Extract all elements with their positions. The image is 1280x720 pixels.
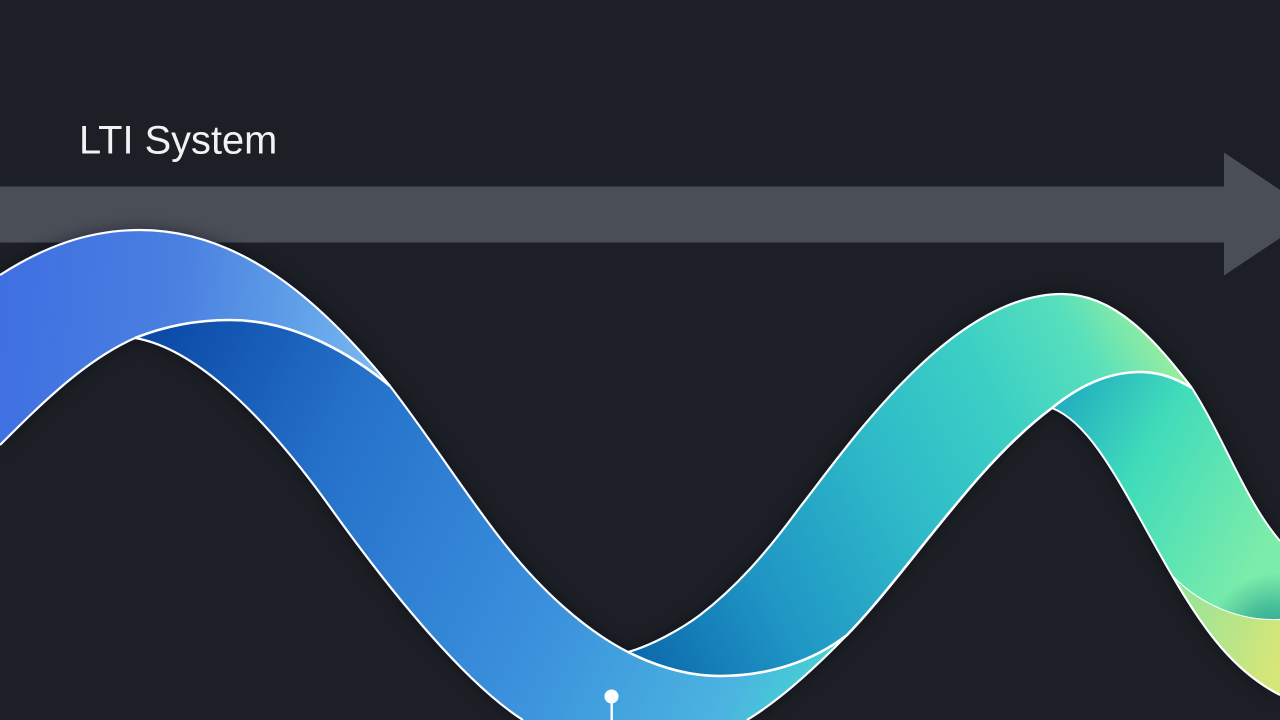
title: LTI System: [79, 118, 277, 162]
ribbon segment 4: second descending band: [1052, 372, 1280, 620]
ribbon shadow: [0, 230, 1280, 720]
ribbon segment 3: rising band and second crest: [628, 294, 1192, 676]
ribbon segment 2: descending band: [135, 320, 847, 720]
arrow: system axis: [0, 152, 1280, 276]
ribbon segment 1: first crest: [0, 230, 390, 445]
marker pin: [604, 690, 618, 720]
ribbon segment 5: yellow-green tail: [1173, 577, 1280, 695]
